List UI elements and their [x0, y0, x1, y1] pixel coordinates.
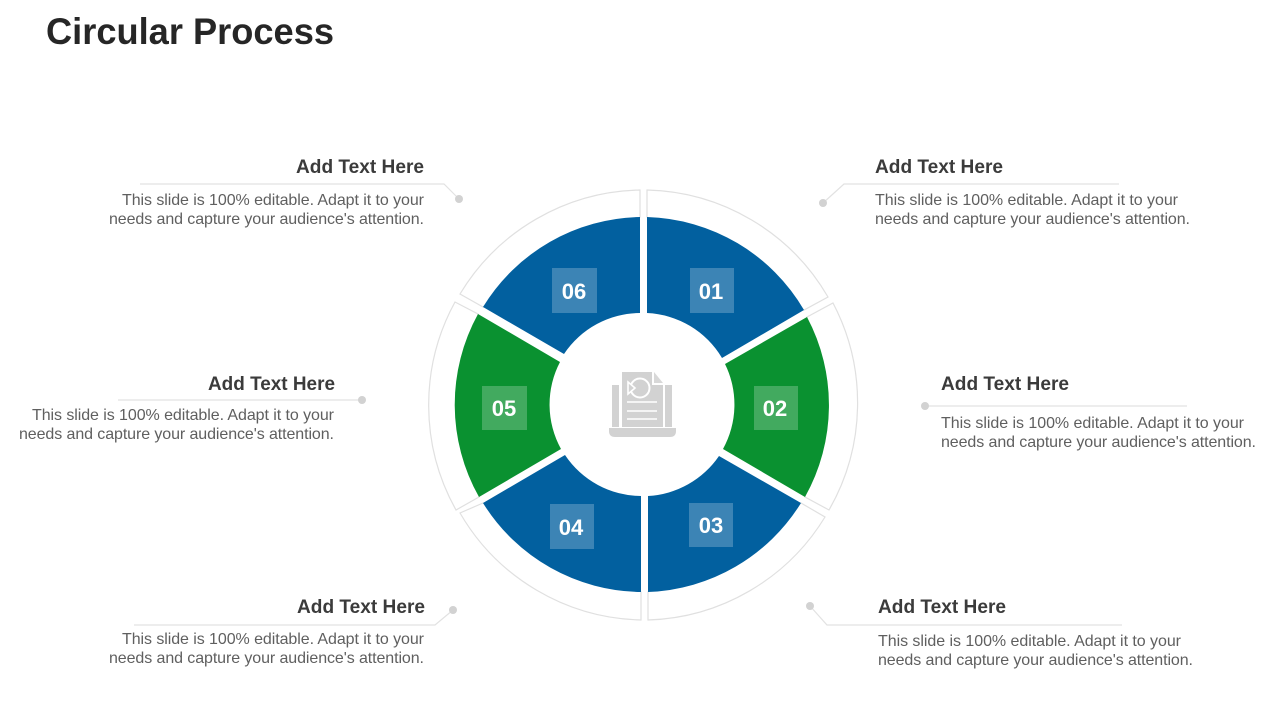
callout: 04 bottom left: This slide is 100% editable. Adapt it to your	[122, 631, 425, 648]
segment 04	[483, 455, 641, 592]
callout: 05 middle left: This slide is 100% editable. Adapt it to your	[32, 407, 335, 424]
callout: 02 middle right	[921, 374, 1256, 451]
segment 01: 01	[699, 279, 723, 304]
segment 02: 02	[763, 396, 787, 421]
callout: 01 top right: This slide is 100% editable. Adapt it to your	[875, 192, 1179, 209]
segment 03	[648, 456, 801, 592]
callout: 04 bottom left: needs and capture your audience's attention.	[109, 650, 424, 667]
callout: 03 bottom right: needs and capture your audience's attention.	[878, 652, 1193, 669]
callout: 06 top left: Add Text Here	[296, 157, 424, 178]
callout: 02 middle right: needs and capture your audience's attention.	[941, 434, 1256, 451]
callout: 03 bottom right: This slide is 100% editable. Adapt it to your	[878, 633, 1182, 650]
segment 01	[647, 217, 804, 358]
segment 03: 03	[699, 513, 723, 538]
callout: 06 top left: This slide is 100% editable. Adapt it to your	[122, 192, 425, 209]
outer ring segment 03	[648, 503, 825, 620]
segment 05: 05	[492, 396, 516, 421]
segment 02	[723, 317, 829, 497]
callout: 06 top left: needs and capture your audience's attention.	[109, 211, 424, 228]
callout: 05 middle left	[19, 374, 366, 443]
segment 06: 06	[562, 279, 586, 304]
callout: 06 top left	[109, 157, 463, 228]
outer ring segment 05	[429, 302, 479, 510]
callout: 01 top right	[819, 157, 1190, 228]
callout: 01 top right: Add Text Here	[875, 157, 1003, 178]
icon: document on laptop	[609, 372, 676, 437]
segment 05	[455, 314, 561, 497]
segment 04: 04	[559, 515, 584, 540]
callout: 04 bottom left	[109, 597, 457, 667]
outer ring segment 04	[460, 503, 641, 620]
callout: 02 middle right: This slide is 100% editable. Adapt it to your	[941, 415, 1245, 432]
callout: 03 bottom right: Add Text Here	[878, 597, 1006, 618]
outer ring segment 06	[460, 190, 640, 307]
segment 06	[483, 217, 640, 354]
callout: 05 middle left: needs and capture your audience's attention.	[19, 426, 334, 443]
callout: 01 top right: needs and capture your audience's attention.	[875, 211, 1190, 228]
outer ring segment 01	[647, 190, 828, 310]
callout: 05 middle left: Add Text Here	[208, 374, 335, 395]
outer ring segment 02	[805, 303, 858, 510]
callout: 03 bottom right	[806, 597, 1193, 669]
title: Circular Process	[46, 11, 334, 52]
circular process diagram	[429, 190, 858, 620]
callout: 02 middle right: Add Text Here	[941, 374, 1069, 395]
callout: 04 bottom left: Add Text Here	[297, 597, 425, 618]
